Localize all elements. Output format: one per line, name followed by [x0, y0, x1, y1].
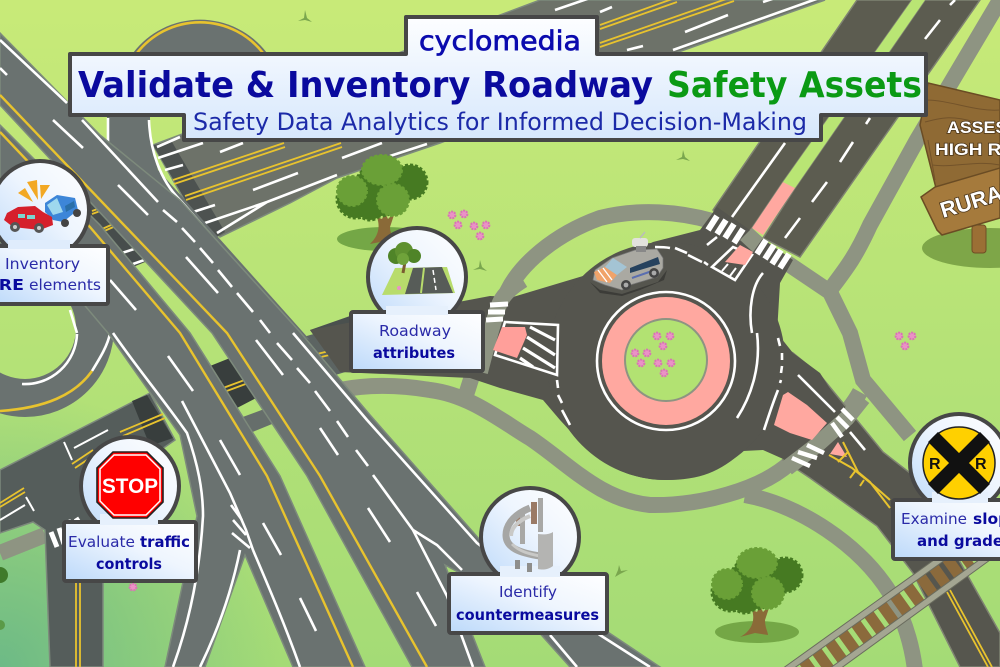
splitter island: west [486, 304, 558, 375]
splitter island: southeast [774, 392, 890, 508]
under-highway strip, upper left [90, 197, 150, 267]
label: countermeasures [456, 606, 599, 624]
label [456, 583, 599, 624]
northeast road, left carriageway [713, 0, 912, 245]
label: Examine [901, 510, 967, 528]
railway crossing [786, 555, 990, 667]
wooden sign [920, 83, 1000, 268]
callout: Inventory MIRE elements [0, 161, 108, 304]
label: Identify [499, 583, 557, 601]
dark underpass and connector [310, 316, 360, 372]
inspection vehicle [590, 232, 667, 296]
icon: guardrail [506, 498, 553, 572]
loop ramp merge [107, 100, 310, 340]
label: Roadway [379, 322, 451, 340]
northeast highway carriageway [0, 33, 660, 667]
icon: railroad crossing sign: R [929, 456, 941, 473]
label: traffic [140, 533, 190, 551]
tree: near interchange [337, 155, 433, 251]
roundabout central island [597, 292, 735, 430]
tree: lower centre [712, 548, 802, 643]
icon: car crash [4, 180, 81, 233]
label: Evaluate [68, 533, 135, 551]
roundabout lane markings [557, 0, 955, 450]
subtitle: Safety Data Analytics for Informed Decision-Making [193, 108, 807, 136]
grass tufts [298, 10, 690, 577]
southeast road [783, 353, 1000, 667]
flowers [130, 211, 915, 590]
icon: railroad crossing sign: R [975, 456, 987, 473]
heading accent: Safety Assets [667, 65, 922, 106]
label [68, 533, 190, 573]
label: attributes [373, 344, 455, 362]
icon: road scene [382, 242, 455, 295]
upper cross road and ramps [153, 0, 825, 238]
callout: Examine slopes and grades [893, 414, 1000, 559]
southwest highway carriageway [0, 125, 365, 667]
callout: Evaluate traffic controls [64, 437, 196, 581]
label [901, 510, 1000, 550]
lower-left cross road [0, 316, 360, 667]
icon: stop sign: STOP [102, 475, 158, 498]
callout: Identify countermeasures [449, 488, 607, 633]
label [373, 322, 455, 362]
roundabout asphalt [310, 207, 850, 480]
label: controls [96, 555, 162, 573]
icon: railroad crossing sign [923, 427, 995, 499]
wood grain [925, 100, 1000, 180]
callout: Roadway attributes [351, 228, 483, 371]
dome ramp [133, 20, 267, 53]
southeast sidewalk crossing [787, 398, 863, 468]
label [0, 255, 101, 294]
left loop ramp [0, 258, 110, 411]
northeast road, right carriageway [763, 0, 980, 257]
label: elements [29, 276, 101, 294]
main heading: Validate & Inventory Roadway [78, 65, 653, 106]
upper sign board [920, 83, 1000, 192]
title banner [70, 17, 926, 140]
west sidewalk crossing [480, 280, 523, 372]
splitter island: north [708, 0, 925, 280]
rural board [921, 168, 1000, 235]
brand name: cyclomedia [419, 26, 581, 57]
label: Inventory [5, 255, 80, 273]
icon: stop sign [97, 452, 163, 518]
